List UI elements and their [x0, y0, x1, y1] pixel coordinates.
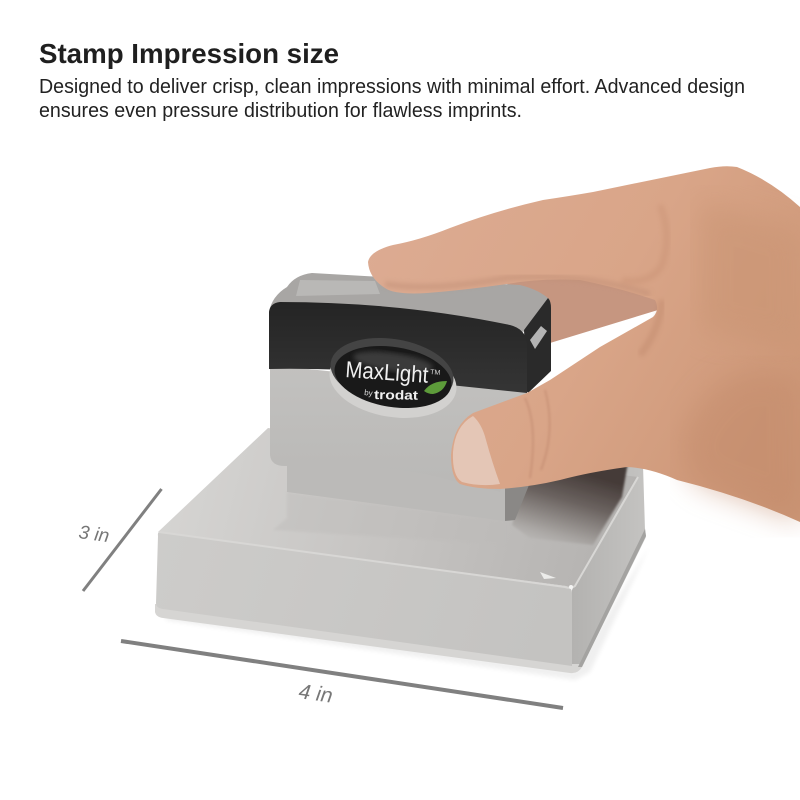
corner glint — [569, 585, 573, 589]
hand — [368, 166, 800, 522]
base top face — [158, 428, 638, 588]
base right lip — [578, 529, 646, 667]
base front face — [156, 531, 572, 666]
badge wordmark: MaxLight — [345, 356, 430, 388]
shadow under hand on base — [512, 462, 628, 545]
badge byline: by — [364, 388, 373, 398]
badge — [330, 338, 456, 416]
stamp neck — [273, 445, 535, 545]
stamp handle — [269, 273, 551, 492]
leaf — [424, 381, 447, 394]
hand silhouette — [368, 166, 800, 522]
palm tone — [682, 371, 800, 522]
index finger lower shading — [385, 277, 650, 294]
badge recess — [324, 335, 462, 427]
back of hand tone — [700, 200, 800, 350]
base shadow — [165, 545, 650, 680]
edge highlight — [159, 477, 638, 588]
dimension: 3 in — [77, 489, 162, 591]
description text: ensures even pressure distribution for flawless imprints. — [39, 100, 522, 122]
description text: Designed to deliver crisp, clean impressions with minimal effort. Advanced design — [39, 76, 745, 98]
middle finger behind stamp — [505, 262, 680, 345]
badge: trodat — [374, 387, 419, 403]
description text — [39, 76, 745, 122]
top grey face — [269, 273, 550, 332]
thumb creases — [525, 390, 550, 478]
black cap — [269, 302, 527, 393]
stamp base pad — [155, 428, 650, 680]
base right side — [572, 465, 645, 664]
dimension: 3 in: 3 in — [77, 522, 111, 547]
base lip — [155, 528, 646, 673]
title: Stamp Impression size — [39, 38, 339, 69]
dimension: 4 in: 4 in — [297, 680, 334, 708]
corner reflection — [540, 572, 556, 579]
knuckle shading — [622, 205, 667, 281]
thumbnail — [453, 416, 500, 485]
badge: TM — [430, 369, 441, 377]
grey body — [270, 365, 528, 492]
right black side — [524, 298, 551, 394]
dimension: 4 in — [121, 641, 563, 708]
